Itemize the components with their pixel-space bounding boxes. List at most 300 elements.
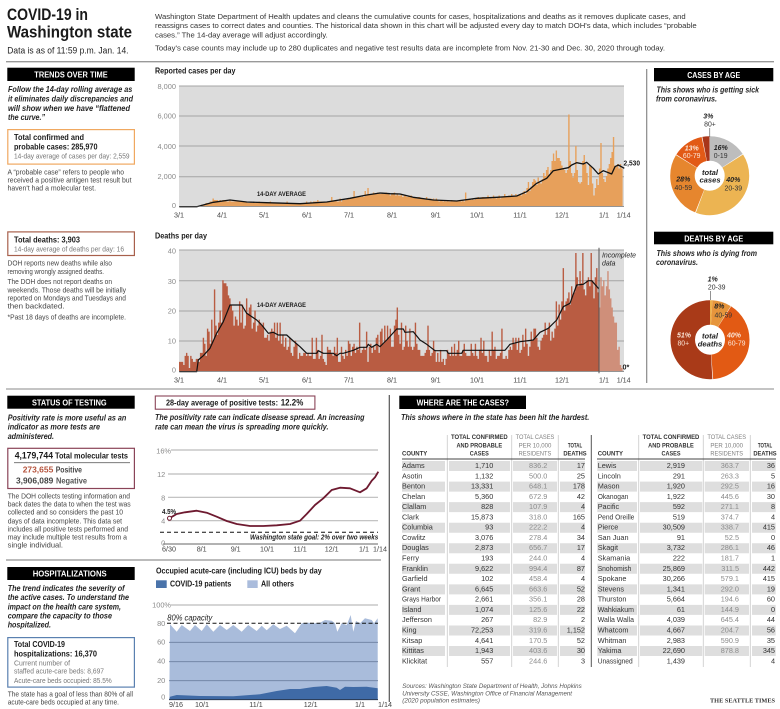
x axis labels: cases: 4/1: [217, 210, 227, 219]
table: counties A-K: 994.4: [529, 564, 547, 573]
donut chart: cases by age: 3%: [703, 114, 714, 121]
intro text: Washington State Department of Health updates and cleans the cumulative counts for cases, hospitalizations and deaths as it removes duplicate cases, and: [155, 12, 686, 21]
table: counties L-Y: 286.1: [721, 543, 739, 552]
table: counties A-K: 3: [581, 656, 585, 665]
table: counties A-K: Clallam: [402, 502, 426, 511]
table: counties A-K: 4,641: [475, 636, 493, 645]
table: counties A-K: 1,943: [475, 646, 493, 655]
x axis labels: deaths: 4/1: [217, 375, 227, 384]
y axis labels: beds: 100%: [152, 600, 171, 609]
y axis labels: positivity: 8: [161, 493, 165, 502]
table header: left: TOTAL: [568, 442, 582, 449]
table: counties L-Y: Okanogan: [598, 492, 628, 501]
hospitalization intro text: hospitalized.: [8, 621, 51, 630]
sources: Sources: Washington State Department of Health, Johns Hopkins: [402, 683, 582, 690]
donut chart: cases by age: 40%: [725, 177, 741, 184]
table: counties L-Y: 519: [673, 512, 685, 521]
trends intro text: Follow the 14-day rolling average as: [8, 85, 133, 94]
start marker: [168, 516, 172, 520]
table: counties A-K: Kittitas: [402, 646, 424, 655]
testing intro text: indicator as more tests are: [8, 422, 100, 431]
table: counties L-Y: Whitman: [598, 636, 626, 645]
label: 14-day average: 14-DAY AVERAGE: [257, 191, 307, 198]
y axis labels: positivity: 0: [161, 539, 165, 548]
hospitalization intro text: [8, 584, 129, 630]
table: counties L-Y: 878.8: [721, 646, 739, 655]
daily case bars: [179, 114, 623, 206]
table: counties L-Y: Skamania: [598, 554, 631, 562]
table: counties A-K: 28: [577, 595, 585, 604]
heading: status of testing: STATUS OF TESTING: [32, 397, 107, 407]
table: counties L-Y: 35: [767, 636, 775, 645]
donut chart: cases by age: 60-79: [683, 153, 701, 160]
table: counties A-K: 72,253: [471, 626, 493, 634]
table: counties L-Y: 25,869: [663, 564, 685, 573]
x axis labels: beds: [169, 700, 392, 709]
x axis labels: cases: 1/1: [599, 210, 609, 219]
table header: left: TOTAL CONFIRMED: [451, 434, 508, 441]
table header: left: DEATHS: [563, 451, 587, 458]
table: counties A-K: 319.6: [529, 626, 547, 634]
donut chart: cases by age: total: [702, 168, 719, 177]
donut chart: cases by age: 80+: [704, 122, 716, 129]
x axis labels: cases: 3/1: [174, 210, 184, 219]
table: counties A-K: King: [402, 626, 417, 634]
y axis labels: cases: 4,000: [158, 142, 176, 151]
table: counties A-K: 165: [573, 512, 585, 521]
table: counties A-K: 656.7: [529, 543, 547, 552]
y axis labels: beds: 0: [161, 693, 165, 702]
testing intro text: Positivity rate is more useful as an: [8, 414, 126, 423]
14-day average line: cases: [179, 162, 624, 207]
table: counties L-Y: Pend Oreille: [598, 512, 634, 521]
note: deaths reporting: *Past 18 days of deaths are incomplete.: [8, 312, 126, 321]
heading: status of testing: [7, 396, 135, 409]
table: counties A-K: Island: [402, 605, 421, 614]
note: probable case: haven't had a molecular test.: [8, 183, 96, 192]
table: counties A-K: 5,360: [475, 492, 493, 501]
x axis labels: beds: 9/16: [169, 700, 183, 709]
table: counties A-K: [402, 434, 587, 667]
note: deaths reporting: The DOH does not report deaths on: [8, 277, 112, 286]
x axis labels: cases: 11/1: [513, 210, 527, 219]
heading: where are the cases: [399, 396, 526, 409]
x axis labels: beds: 11/1: [249, 700, 263, 709]
table: counties A-K: Douglas: [402, 543, 429, 552]
table: counties A-K: 22: [577, 605, 585, 614]
table header: right: TOTAL CASES: [707, 434, 747, 441]
note: probable case: A “probable case” refers to people who: [8, 167, 124, 176]
table: counties L-Y: 291: [673, 471, 685, 480]
table: counties L-Y: 445.6: [721, 492, 739, 501]
note: probable case: received a positive antigen test result but: [8, 175, 132, 184]
y axis labels: cases: 2,000: [158, 172, 176, 181]
y axis labels: deaths: 10: [168, 337, 176, 346]
donut chart: deaths by age: total: [702, 331, 719, 340]
table: counties L-Y: Spokane: [598, 574, 627, 583]
callout: total cases: probable cases: 285,970: [14, 142, 98, 152]
table: counties A-K: 52: [577, 636, 585, 645]
table: counties L-Y: 263.3: [721, 471, 739, 480]
table: counties A-K: Chelan: [402, 492, 425, 501]
x axis labels: deaths: 9/1: [431, 375, 441, 384]
y axis labels: beds: 80: [157, 619, 165, 628]
table: counties A-K: 52: [577, 584, 585, 593]
donut chart: deaths by age: 1%: [708, 277, 719, 284]
table: counties A-K: 1,710: [475, 461, 493, 470]
table: counties L-Y: Pacific: [598, 502, 620, 511]
table: counties L-Y: 194.6: [721, 595, 739, 604]
table: counties L-Y: 52.5: [725, 533, 739, 542]
x axis labels: cases: 1/14: [617, 210, 631, 219]
y axis labels: deaths: 0: [172, 366, 176, 375]
panel: status of testing: [7, 396, 135, 549]
intro text: reassigns cases to correct dates and counties. The historical data shown in this chart will be adjusted every day to match DOH's data, which includes “probable: [155, 21, 697, 30]
callout: total deaths: [8, 232, 134, 256]
table: counties L-Y: 1: [771, 554, 775, 562]
sources: [402, 683, 582, 705]
panel: where are the cases: [399, 396, 777, 705]
table: counties A-K: Grays Harbor: [402, 595, 442, 604]
chart title: cases: Reported cases per day: [155, 66, 236, 75]
callout: total hospitalizations: hospitalizations: 16,370: [14, 648, 97, 658]
donut chart: cases by age: 20-39: [724, 186, 742, 193]
heading: deaths by age: DEATHS BY AGE: [684, 233, 743, 243]
incomplete death bars: [599, 271, 623, 371]
note: testing data: The DOH collects testing information and: [8, 492, 130, 501]
note: deaths reporting: then backdated.: [8, 302, 64, 311]
table header: right: TOTAL: [758, 442, 772, 449]
y axis labels: positivity: 4: [161, 516, 165, 525]
table: counties L-Y: 1,922: [667, 492, 685, 501]
table header: right: DEATHS: [753, 451, 777, 458]
table: counties L-Y: 0: [771, 533, 775, 542]
callout: total hospitalizations: Acute-care beds occupied: 85.5%: [14, 676, 112, 685]
callout: positivity average: [155, 396, 315, 409]
x axis labels: deaths: 6/1: [302, 375, 312, 384]
note: deaths reporting: reported on Mondays and Tuesdays and: [8, 294, 126, 303]
table: counties A-K: 2,661: [475, 595, 493, 604]
table header: right: TOTAL CONFIRMED: [643, 434, 699, 441]
table: counties L-Y: 4,039: [667, 615, 685, 624]
chart title: deaths: Deaths per day: [155, 231, 207, 240]
table: counties L-Y: 0: [771, 605, 775, 614]
table: counties L-Y: 204.7: [721, 626, 739, 634]
table: counties L-Y: 2,919: [667, 461, 685, 470]
table header: left: COUNTY: [402, 451, 428, 458]
table: counties L-Y: 19: [767, 584, 775, 593]
testing intro text: [8, 414, 126, 441]
table: counties A-K: 4: [581, 523, 585, 532]
cases by age text: This shows who is getting sick: [656, 86, 759, 95]
table: counties L-Y: 30: [767, 492, 775, 501]
y axis labels: beds: [152, 600, 171, 702]
donut chart: cases by age: 0-19: [714, 153, 728, 160]
table: counties L-Y: Walla Walla: [598, 615, 635, 624]
x axis labels: beds: 10/1: [195, 700, 209, 709]
y axis labels: positivity: 16%: [156, 446, 171, 455]
x axis labels: positivity: 12/1: [325, 545, 339, 554]
title: [7, 5, 132, 42]
deaths by age text: coronavirus.: [656, 258, 698, 267]
table: counties L-Y: San Juan: [598, 533, 629, 542]
y axis labels: deaths: 20: [168, 307, 176, 316]
y axis labels: beds: 60: [157, 637, 165, 646]
table: counties A-K: 318.0: [529, 512, 547, 521]
x axis labels: positivity: [162, 545, 387, 554]
table: counties L-Y: 1,439: [667, 656, 685, 665]
table: counties A-K: 836.2: [529, 461, 547, 470]
table: counties L-Y: Lewis: [598, 461, 617, 470]
hospitalization intro text: The trend indicates the severity of: [8, 584, 126, 593]
table: counties A-K: 193: [481, 554, 493, 562]
y axis labels: beds: 20: [157, 676, 165, 685]
table: counties L-Y: 4: [771, 512, 775, 521]
table: counties A-K: 500.0: [529, 471, 547, 480]
table: counties A-K: 4: [581, 554, 585, 562]
table: counties A-K: Cowlitz: [402, 533, 426, 542]
x axis labels: positivity: 1/1: [359, 545, 369, 554]
heading: trends over time: [7, 68, 135, 81]
donut chart: deaths by age: 40%: [726, 333, 742, 340]
y axis labels: positivity: [156, 446, 171, 548]
legend: All others: [261, 579, 294, 588]
table: counties A-K: Franklin: [402, 564, 428, 573]
intro text: Today's case counts may include up to 280 duplicates and negative test results data are incomplete from Nov. 21-30 and Dec. 30, 2020 through today.: [155, 44, 665, 53]
note: testing data: includes all positive tests performed and: [8, 524, 128, 533]
y axis labels: cases: [158, 82, 176, 210]
table: counties L-Y: 374.7: [721, 512, 739, 521]
capacity line: [167, 622, 378, 624]
table: counties L-Y: Thurston: [598, 595, 626, 604]
table: counties A-K: 125.6: [529, 605, 547, 614]
x axis labels: deaths: 1/1: [599, 375, 609, 384]
table header: right: RESIDENTS: [710, 451, 744, 458]
table: counties A-K: 6,645: [475, 584, 493, 593]
callout: total molecular tests: Negative: [56, 477, 88, 486]
donut chart: deaths by age: [677, 277, 746, 367]
table: counties L-Y: 592: [673, 502, 685, 511]
date note: Data is as of 11:59 p.m. Jan. 14.: [7, 46, 128, 56]
capacity label: 80% capacity: [167, 613, 213, 622]
table header: right: PER 10,000: [710, 442, 743, 449]
callout: total hospitalizations: [8, 638, 134, 687]
x axis labels: positivity: 6/30: [162, 545, 176, 554]
intro text: cases.” The 14-day average will adjust accordingly.: [155, 30, 328, 39]
legend: COVID-19 patients: [170, 579, 232, 588]
y axis labels: deaths: 40: [168, 246, 176, 255]
callout: total deaths: 14-day average of deaths per day: 16: [14, 244, 124, 253]
table: counties A-K: 1,152: [567, 626, 585, 634]
table: counties L-Y: 5,664: [667, 595, 685, 604]
note: deaths reporting: [7, 259, 126, 321]
table: counties A-K: 17: [577, 461, 585, 470]
chart: positivity rate: [155, 396, 387, 554]
table: counties A-K: 178: [573, 482, 585, 491]
table: counties L-Y: 91: [677, 533, 685, 542]
callout: total cases: Total confirmed and: [14, 132, 84, 142]
table: counties A-K: Jefferson: [402, 615, 432, 624]
table: counties L-Y: 1,341: [667, 584, 685, 593]
callout: total molecular tests: Total molecular tests: [55, 451, 128, 461]
callout: positivity average: 12.2%: [281, 398, 303, 408]
table: counties A-K: 222.2: [529, 523, 547, 532]
table header: right: CASES: [662, 451, 681, 458]
y axis labels: deaths: [168, 246, 176, 375]
note: deaths reporting: removing wrongly assigned deaths.: [8, 267, 104, 276]
callout: total molecular tests: Positive: [56, 466, 82, 475]
covid patients area: [169, 686, 378, 699]
goal line: [160, 531, 378, 533]
table: counties L-Y: 363.7: [721, 461, 739, 470]
table: counties L-Y: 16: [767, 482, 775, 491]
donut chart: deaths by age: 20-39: [708, 285, 726, 292]
chart: occupied beds: [152, 566, 392, 709]
trends intro text: will show when we have “flattened: [8, 104, 131, 113]
donut chart: cases by age: 13%: [685, 145, 699, 152]
panel: cases by age: [654, 68, 773, 203]
table: counties A-K: Benton: [402, 482, 425, 491]
x axis labels: positivity: 8/1: [197, 545, 207, 554]
table: counties L-Y: Mason: [598, 482, 620, 491]
intro text: [155, 12, 697, 53]
note: deaths reporting: weekends. Those deaths will be initially: [7, 285, 126, 294]
table: counties L-Y: Stevens: [598, 584, 624, 593]
positivity text: The positivity rate can indicate disease spread. An increasing: [155, 413, 364, 422]
table header: right: AND PROBABLE: [648, 442, 694, 449]
cases by age text: [656, 86, 759, 104]
note: occupancy goal: [8, 690, 133, 707]
donut chart: deaths by age: 51%: [677, 333, 692, 340]
positivity text: rate can mean the virus is spreading more quickly.: [155, 422, 328, 431]
table: counties A-K: 828: [481, 502, 493, 511]
table: counties L-Y: 590.9: [721, 636, 739, 645]
callout: total cases: [8, 130, 134, 164]
x axis labels: deaths: 8/1: [387, 375, 397, 384]
table: counties A-K: 34: [577, 533, 585, 542]
donut chart: cases by age: 16%: [714, 145, 728, 152]
table: counties L-Y: 46: [767, 543, 775, 552]
table: counties A-K: 42: [577, 492, 585, 501]
note: deaths reporting: DOH reports new deaths while also: [8, 259, 112, 268]
testing intro text: administered.: [8, 432, 54, 441]
table: counties L-Y: 415: [763, 523, 775, 532]
table: counties A-K: 278.4: [529, 533, 547, 542]
table: counties A-K: Asotin: [402, 471, 422, 480]
table: counties L-Y: 8: [771, 502, 775, 511]
table: counties L-Y: 311.5: [721, 564, 739, 573]
table: counties L-Y: 579.1: [721, 574, 739, 583]
chart: reported cases per day: [155, 66, 640, 219]
table: counties A-K: 9,622: [475, 564, 493, 573]
x axis labels: cases: 6/1: [302, 210, 312, 219]
table: counties A-K: 1,074: [475, 605, 493, 614]
trends intro text: the curve.”: [8, 113, 46, 122]
x axis labels: deaths: 1/14: [617, 375, 631, 384]
donut chart: deaths by age: 8%: [714, 304, 725, 311]
table: counties A-K: 356.1: [529, 595, 547, 604]
callout: total hospitalizations: staffed acute-care beds: 8,697: [14, 667, 104, 676]
hospitalization intro text: compare the capacity to those: [8, 612, 112, 621]
x axis labels: deaths: 11/1: [513, 375, 527, 384]
heading: where are the cases: WHERE ARE THE CASES?: [417, 397, 509, 407]
trends intro text: [8, 85, 134, 122]
chart: deaths per day: [155, 231, 636, 384]
table: counties A-K: Garfield: [402, 574, 428, 583]
table: counties A-K: Grant: [402, 584, 420, 593]
table: counties A-K: 267: [481, 615, 493, 624]
table: counties L-Y: Lincoln: [598, 471, 621, 480]
y axis labels: cases: 6,000: [158, 111, 176, 120]
table: counties L-Y: 4: [771, 656, 775, 665]
table: counties A-K: Klickitat: [402, 656, 427, 665]
panel: hospitalizations: [7, 567, 135, 707]
table: counties A-K: Ferry: [402, 554, 419, 562]
table header: left: AND PROBABLE: [456, 442, 503, 449]
donut chart: deaths by age: deaths: [698, 339, 722, 348]
hospitalization intro text: impact on the health care system,: [8, 602, 121, 611]
x axis labels: cases: 12/1: [555, 210, 569, 219]
x axis labels: deaths: 5/1: [259, 375, 269, 384]
table: counties L-Y: 36: [767, 461, 775, 470]
table: counties A-K: 672.9: [529, 492, 547, 501]
table header: right: COUNTY: [598, 451, 623, 458]
donut chart: deaths by age: 40-59: [714, 312, 732, 319]
table: counties L-Y: 292.0: [721, 584, 739, 593]
callout: total cases: 14-day average of cases per day: 2,559: [14, 152, 130, 161]
table: counties L-Y: 222: [673, 554, 685, 562]
table: counties A-K: 3,076: [475, 533, 493, 542]
table: counties L-Y: 292.5: [721, 482, 739, 491]
table: counties A-K: 1,132: [475, 471, 493, 480]
table: counties L-Y: [597, 434, 777, 667]
label: incomplete data: Incomplete: [602, 250, 636, 259]
callout: total hospitalizations: Total COVID-19: [14, 639, 65, 649]
note: occupancy goal: acute-care beds occupied at any time.: [8, 698, 119, 707]
heading: hospitalizations: HOSPITALIZATIONS: [33, 568, 107, 578]
note: probable case: [8, 167, 132, 192]
table: counties L-Y: 30,266: [663, 574, 685, 583]
donut chart: cases by age: [674, 114, 742, 203]
table: counties A-K: 15,873: [471, 512, 493, 521]
table: counties L-Y: 144.9: [721, 605, 739, 614]
table: counties L-Y: Snohomish: [598, 564, 631, 573]
table: counties A-K: 663.6: [529, 584, 547, 593]
table: counties A-K: 4: [581, 502, 585, 511]
table: counties A-K: 244.0: [529, 554, 547, 562]
x axis labels: cases: 8/1: [387, 210, 397, 219]
x axis labels: deaths: 12/1: [555, 375, 569, 384]
table: counties A-K: Clark: [402, 512, 419, 521]
x axis labels: positivity: 1/14: [373, 545, 387, 554]
y axis labels: cases: 8,000: [158, 82, 176, 91]
table: counties A-K: 13,331: [471, 482, 493, 491]
x axis labels: positivity: 10/1: [260, 545, 274, 554]
label: latest average: 2,530: [624, 159, 640, 168]
trends intro text: it eliminates daily discrepancies and: [8, 95, 134, 104]
note: testing data: back dates the data to when the test was: [8, 500, 131, 509]
table: counties L-Y: Wahkiakum: [598, 605, 634, 614]
daily death bars: [179, 253, 599, 371]
x axis labels: deaths: 10/1: [470, 375, 484, 384]
where text: This shows where in the state has been hit the hardest.: [401, 413, 589, 422]
table: counties L-Y: 30,509: [663, 523, 685, 532]
x axis labels: positivity: 9/1: [231, 545, 241, 554]
x axis labels: deaths: 3/1: [174, 375, 184, 384]
table: counties L-Y: 3,732: [667, 543, 685, 552]
heading: cases by age: CASES BY AGE: [687, 70, 740, 80]
panel: deaths by age: [654, 232, 773, 367]
